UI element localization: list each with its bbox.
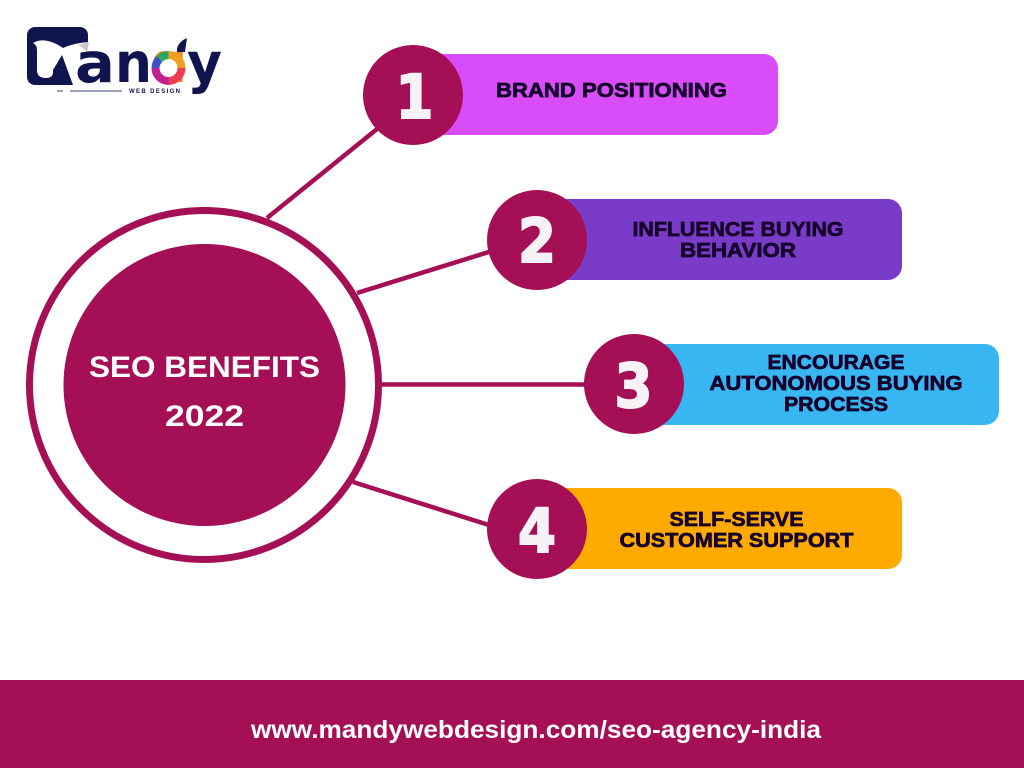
number 2: 2 [518,206,556,277]
logo: Mandy Web Design [27,27,222,95]
logo letter y: y [187,31,222,95]
logo letter a: a [75,31,115,95]
logo tagline: WEB DESIGN [129,89,180,95]
item 2: influence buying behavior [487,190,902,290]
item 3: encourage autonomous buying process: AUTONOMOUS BUYING [710,372,962,395]
badge 4 [487,479,587,579]
label 1: BRAND POSITIONING [496,79,727,102]
bar 2 [545,199,902,280]
item 4: self-serve customer support [487,479,902,579]
hub year: 2022 [165,400,244,433]
number 3: 3 [614,351,652,422]
footer url: www.mandywebdesign.com/seo-agency-india [250,716,822,744]
logo fold [78,42,89,52]
footer band [0,680,1024,768]
bar 4 [545,488,902,569]
logo coloured d: d [150,31,187,95]
item 3: encourage autonomous buying process [584,334,999,434]
logo letter n: n [115,31,152,95]
number 4: 4 [518,496,556,567]
hub title: SEO BENEFITS [89,351,320,384]
connector lines [267,125,590,526]
label 4: SELF-SERVE [670,508,804,531]
item 4: self-serve customer support: CUSTOMER SUPPORT [620,529,854,552]
logo block [27,27,88,85]
label 3: ENCOURAGE [768,351,904,374]
bar 1 [420,54,778,135]
badge 2 [487,190,587,290]
central hub [30,210,378,560]
inner circle [64,244,346,526]
label 2: INFLUENCE BUYING [632,218,844,241]
outer ring [30,210,378,560]
bar 3 [642,344,999,425]
logo underline [57,90,122,92]
item 1: brand positioning [363,45,778,145]
badge 3 [584,334,684,434]
item 3: encourage autonomous buying process: PROCESS [784,393,888,416]
badge 1 [363,45,463,145]
number 1: 1 [396,62,434,133]
item 2: influence buying behavior: BEHAVIOR [680,239,796,262]
logo M shape [33,40,89,90]
